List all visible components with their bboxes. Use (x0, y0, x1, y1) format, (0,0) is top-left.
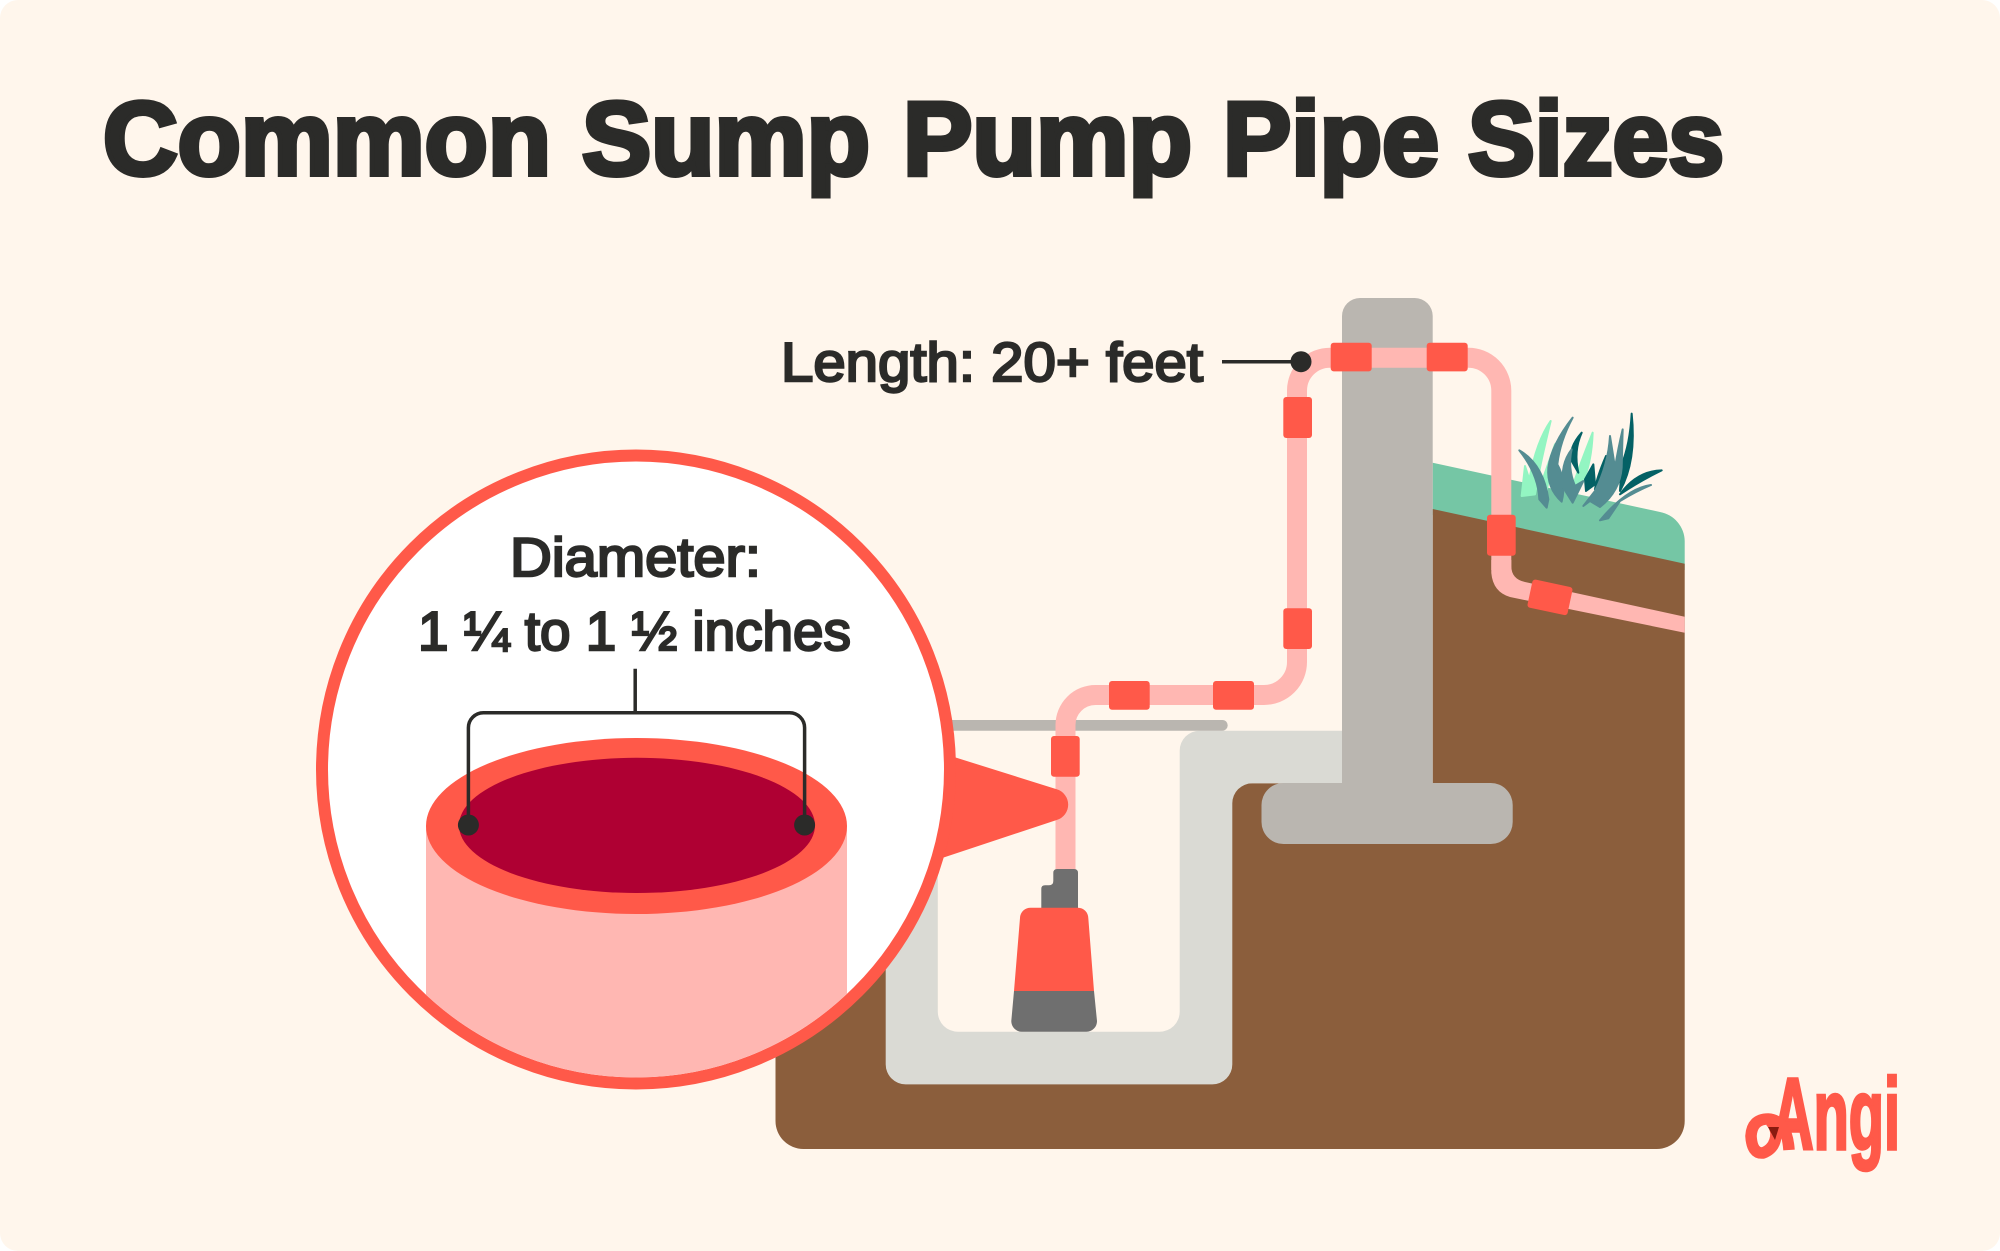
pump neck (1041, 869, 1078, 908)
diameter value: 1 ¼ to 1 ½ inches (418, 600, 851, 662)
logo arch gap (1770, 1118, 1792, 1152)
pump base (1011, 991, 1097, 1032)
title: Pipe (1223, 82, 1439, 198)
length text: Length: 20+ feet (781, 331, 1203, 393)
magnifier circle (322, 456, 950, 1126)
discharge pipe (1051, 343, 1685, 880)
concrete sump basin (886, 731, 1345, 1084)
icon: sump pump (1011, 869, 1097, 1032)
pipe opening (459, 758, 815, 893)
diameter label: Diameter: (510, 526, 761, 588)
title: Common (103, 82, 551, 198)
title: Sizes (1468, 82, 1724, 198)
pipe cross-section (426, 738, 847, 1078)
pump body (1014, 908, 1094, 991)
wall column (1342, 298, 1433, 800)
circle fill (322, 456, 950, 1084)
pipe body (426, 827, 847, 1078)
floor slab (900, 720, 1228, 731)
icon: grass (1519, 414, 1662, 520)
logo: Angi (1751, 1059, 1900, 1171)
soil (776, 509, 1685, 1149)
logo swoosh overlap (1768, 1127, 1779, 1140)
buried pipe outlet (1491, 560, 1685, 633)
magnifier callout tail (900, 740, 1068, 872)
pipe couplings (1051, 343, 1573, 777)
pipe rim (426, 738, 847, 914)
foundation wall (1262, 298, 1513, 844)
ground cross-section (776, 463, 1685, 1149)
grass strip (1433, 463, 1685, 570)
length label (781, 331, 1312, 393)
title: Pump (903, 82, 1192, 198)
footing (1262, 783, 1513, 844)
title: Sump (582, 82, 870, 198)
length marker dot (1290, 351, 1312, 372)
diameter bracket (458, 669, 815, 836)
logo swoosh (1751, 1119, 1789, 1153)
pipe run (1066, 358, 1501, 880)
logo wordmark: Angi (1772, 1059, 1900, 1171)
length leader line (1222, 360, 1301, 363)
